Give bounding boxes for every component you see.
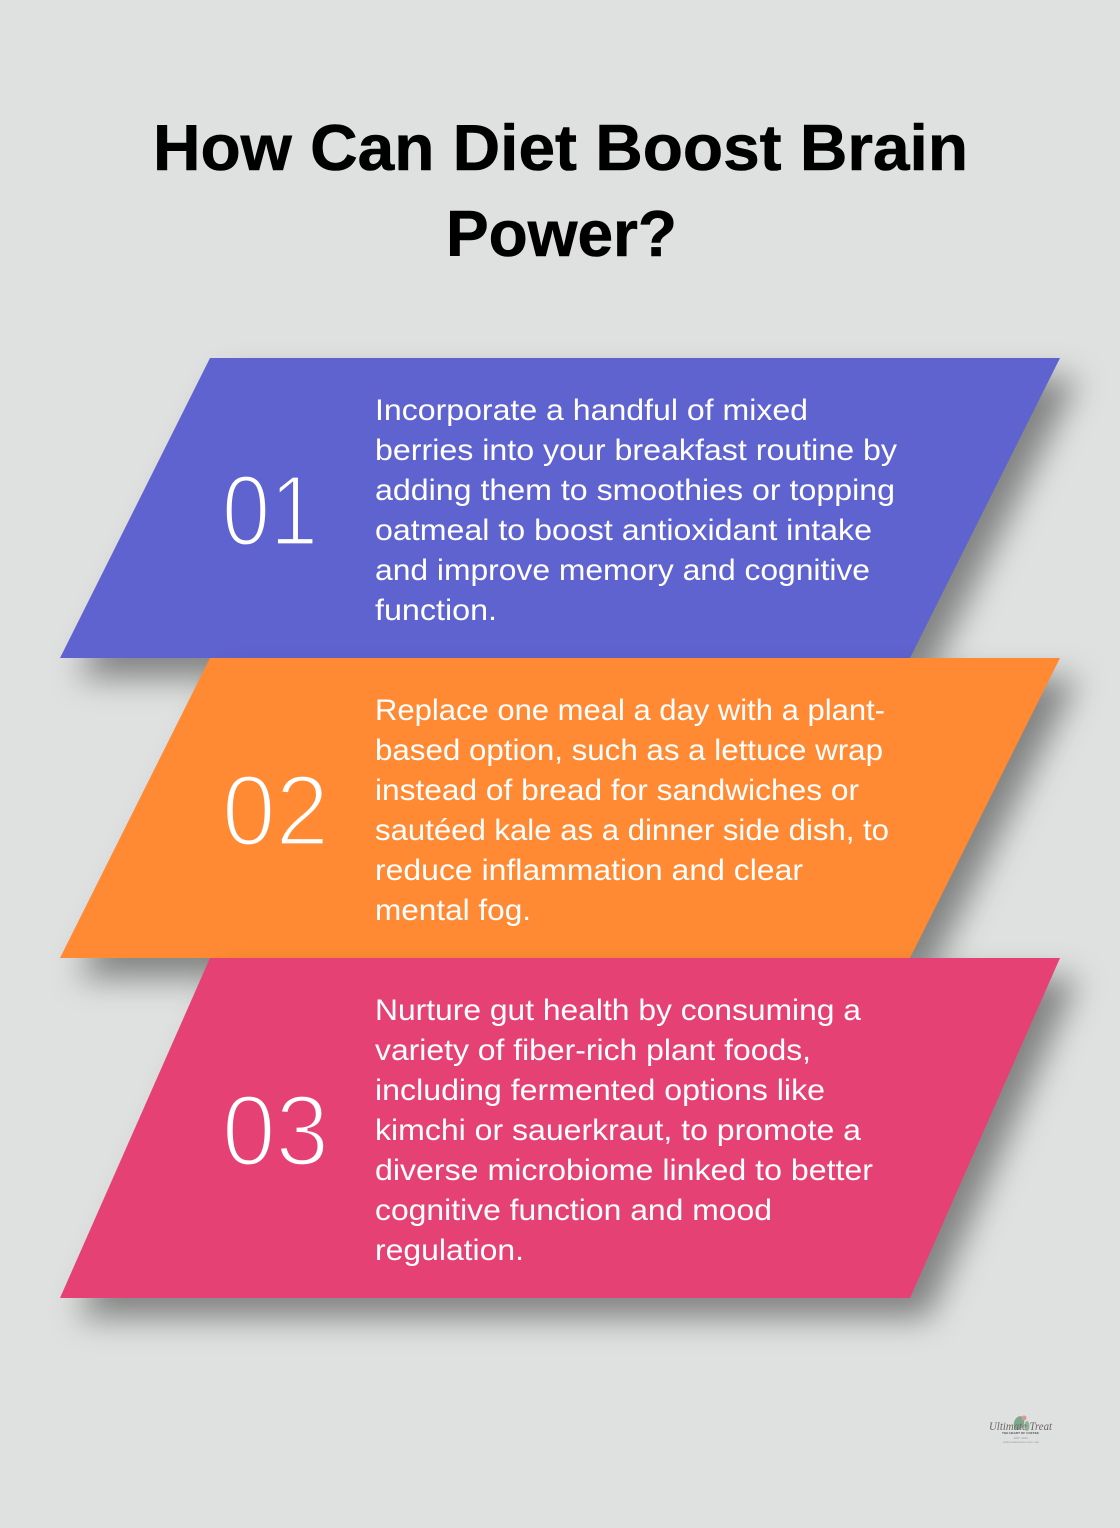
step 01 text: Incorporate a handful of mixed xyxy=(375,394,808,427)
step 03 text: diverse microbiome linked to better xyxy=(375,1154,873,1187)
step 01 text: berries into your breakfast routine by xyxy=(375,434,897,467)
step 03 text: variety of fiber-rich plant foods, xyxy=(375,1034,811,1067)
logo: Ultimate Treat: THE HEART OF COFFEE xyxy=(1002,1431,1039,1435)
step 03 text: including fermented options like xyxy=(375,1074,825,1107)
step 02 text: sautéed kale as a dinner side dish, to xyxy=(375,814,889,847)
panel: step 02 xyxy=(60,658,1078,978)
step 03 text: cognitive function and mood xyxy=(375,1194,772,1227)
title: How Can Diet Boost Brain xyxy=(153,111,968,184)
icon: leaves xyxy=(1012,1415,1030,1431)
step 01 text: oatmeal to boost antioxidant intake xyxy=(375,514,872,547)
step 01 text: adding them to smoothies or topping xyxy=(375,474,895,507)
step 01 text: and improve memory and cognitive xyxy=(375,554,870,587)
step 03 text: Nurture gut health by consuming a xyxy=(375,994,861,1027)
step 02 text: mental fog. xyxy=(375,894,531,927)
logo: Ultimate Treat: ultimatetreat.com.au xyxy=(1003,1440,1039,1444)
step 03 text: regulation. xyxy=(375,1234,524,1267)
panel: step 03 xyxy=(60,958,1078,1318)
step number 02: 02 xyxy=(222,755,329,867)
step 02 text: instead of bread for sandwiches or xyxy=(375,774,859,807)
step number 03: 03 xyxy=(222,1075,329,1187)
step 03 text xyxy=(375,994,873,1267)
step 02 text: Replace one meal a day with a plant- xyxy=(375,694,885,727)
step 01 text: function. xyxy=(375,594,497,627)
step 01 text xyxy=(375,394,897,627)
step number 01: 01 xyxy=(222,455,318,567)
logo: Ultimate Treat: EST. 2014 xyxy=(1014,1436,1029,1440)
logo: Ultimate Treat xyxy=(989,1415,1053,1444)
title: Power? xyxy=(446,197,677,270)
panel: step 01 xyxy=(60,358,1078,678)
step 02 text xyxy=(375,694,889,927)
step 02 text: based option, such as a lettuce wrap xyxy=(375,734,883,767)
title xyxy=(153,111,968,270)
logo: Ultimate Treat: Ultimate Treat xyxy=(989,1419,1053,1433)
step 02 text: reduce inflammation and clear xyxy=(375,854,803,887)
step 03 text: kimchi or sauerkraut, to promote a xyxy=(375,1114,861,1147)
